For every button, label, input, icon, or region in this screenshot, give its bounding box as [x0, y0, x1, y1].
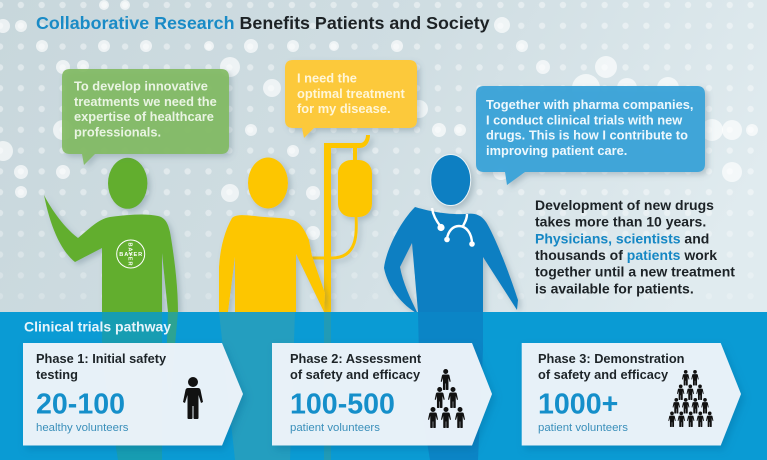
tube — [306, 216, 356, 258]
Bayer logo — [117, 240, 145, 268]
connector — [353, 147, 357, 161]
text block: development summary: and — [681, 230, 709, 246]
speech bubble: physician: I conduct clinical trials with new — [486, 112, 683, 127]
stethoscope — [432, 208, 475, 247]
speech bubble: industry: To develop innovative — [74, 78, 208, 94]
text block: development summary: is available for patients. — [535, 280, 694, 296]
card: phase 2 — [272, 343, 492, 446]
card: phase 1 — [23, 343, 243, 446]
icon: group of six people — [428, 369, 465, 428]
Bayer logo: BAYER — [119, 252, 142, 258]
speech bubble: industry: treatments we need the — [74, 94, 217, 109]
speech bubble: patient: I need the — [297, 70, 357, 86]
text block: development summary: together until a new treatment — [535, 264, 735, 280]
card: phase 2: patient volunteers — [290, 422, 380, 434]
speech bubble: physician: Together with pharma companies, — [486, 97, 693, 112]
figure: green Bayer scientist — [44, 158, 178, 312]
card: phase 1: testing — [36, 367, 78, 382]
card: phase 2: 100-500 — [290, 388, 395, 420]
figure: yellow patient — [219, 158, 325, 312]
drip bag — [338, 160, 372, 217]
card: phase 3: of safety and efficacy — [538, 367, 669, 382]
text block: development summary: takes more than 10 years. — [535, 214, 706, 230]
figure: IV stand and drip bag — [306, 135, 372, 312]
background with dot pattern — [0, 0, 767, 312]
icon: single person — [183, 377, 203, 419]
text block: development summary: thousands of — [535, 247, 627, 263]
speech bubble: patient: optimal treatment — [297, 86, 405, 101]
speech bubble: industry: expertise of healthcare — [74, 109, 214, 124]
text block: development summary: Physicians, scientists — [535, 230, 681, 246]
card: phase 2: Phase 2: Assessment — [290, 351, 422, 366]
speech bubble: patient — [285, 60, 417, 138]
card: phase 3: 1000+ — [538, 388, 618, 420]
head — [431, 154, 471, 206]
figure: blue doctor — [384, 154, 518, 314]
title: Collaborative Research Benefits Patients and Society — [36, 13, 490, 33]
speech bubble: physician — [476, 86, 705, 185]
text block: development summary — [535, 197, 735, 296]
icon: crowd of people — [668, 370, 713, 427]
speech bubble: physician: improving patient care. — [486, 143, 627, 158]
speech bubble: patient: for my disease. — [297, 101, 391, 116]
Bayer logo: BAYER — [127, 242, 133, 266]
body — [384, 207, 518, 314]
card: phase 1: 20-100 — [36, 388, 125, 420]
panel: clinical trials pathway — [0, 312, 767, 460]
card: phase 1: healthy volunteers — [36, 422, 129, 434]
text block: development summary: Development of new drugs — [535, 197, 714, 213]
card: phase 3: Phase 3: Demonstration — [538, 351, 685, 366]
text block: development summary: patients work — [627, 247, 717, 263]
card: phase 2: of safety and efficacy — [290, 367, 421, 382]
figure reflections — [102, 312, 483, 460]
heading: Clinical trials pathway — [24, 318, 171, 334]
card: phase 1: Phase 1: Initial safety — [36, 351, 167, 366]
body — [44, 195, 178, 312]
speech bubble: industry — [62, 69, 229, 165]
speech bubble: industry: professionals. — [74, 124, 161, 139]
card: phase 3: patient volunteers — [538, 422, 628, 434]
body — [219, 215, 325, 312]
card: phase 3 — [522, 343, 741, 446]
head — [108, 158, 147, 209]
speech bubble: physician: drugs. This is how I contribute to — [486, 128, 688, 143]
head — [248, 158, 288, 208]
pole — [324, 135, 370, 312]
